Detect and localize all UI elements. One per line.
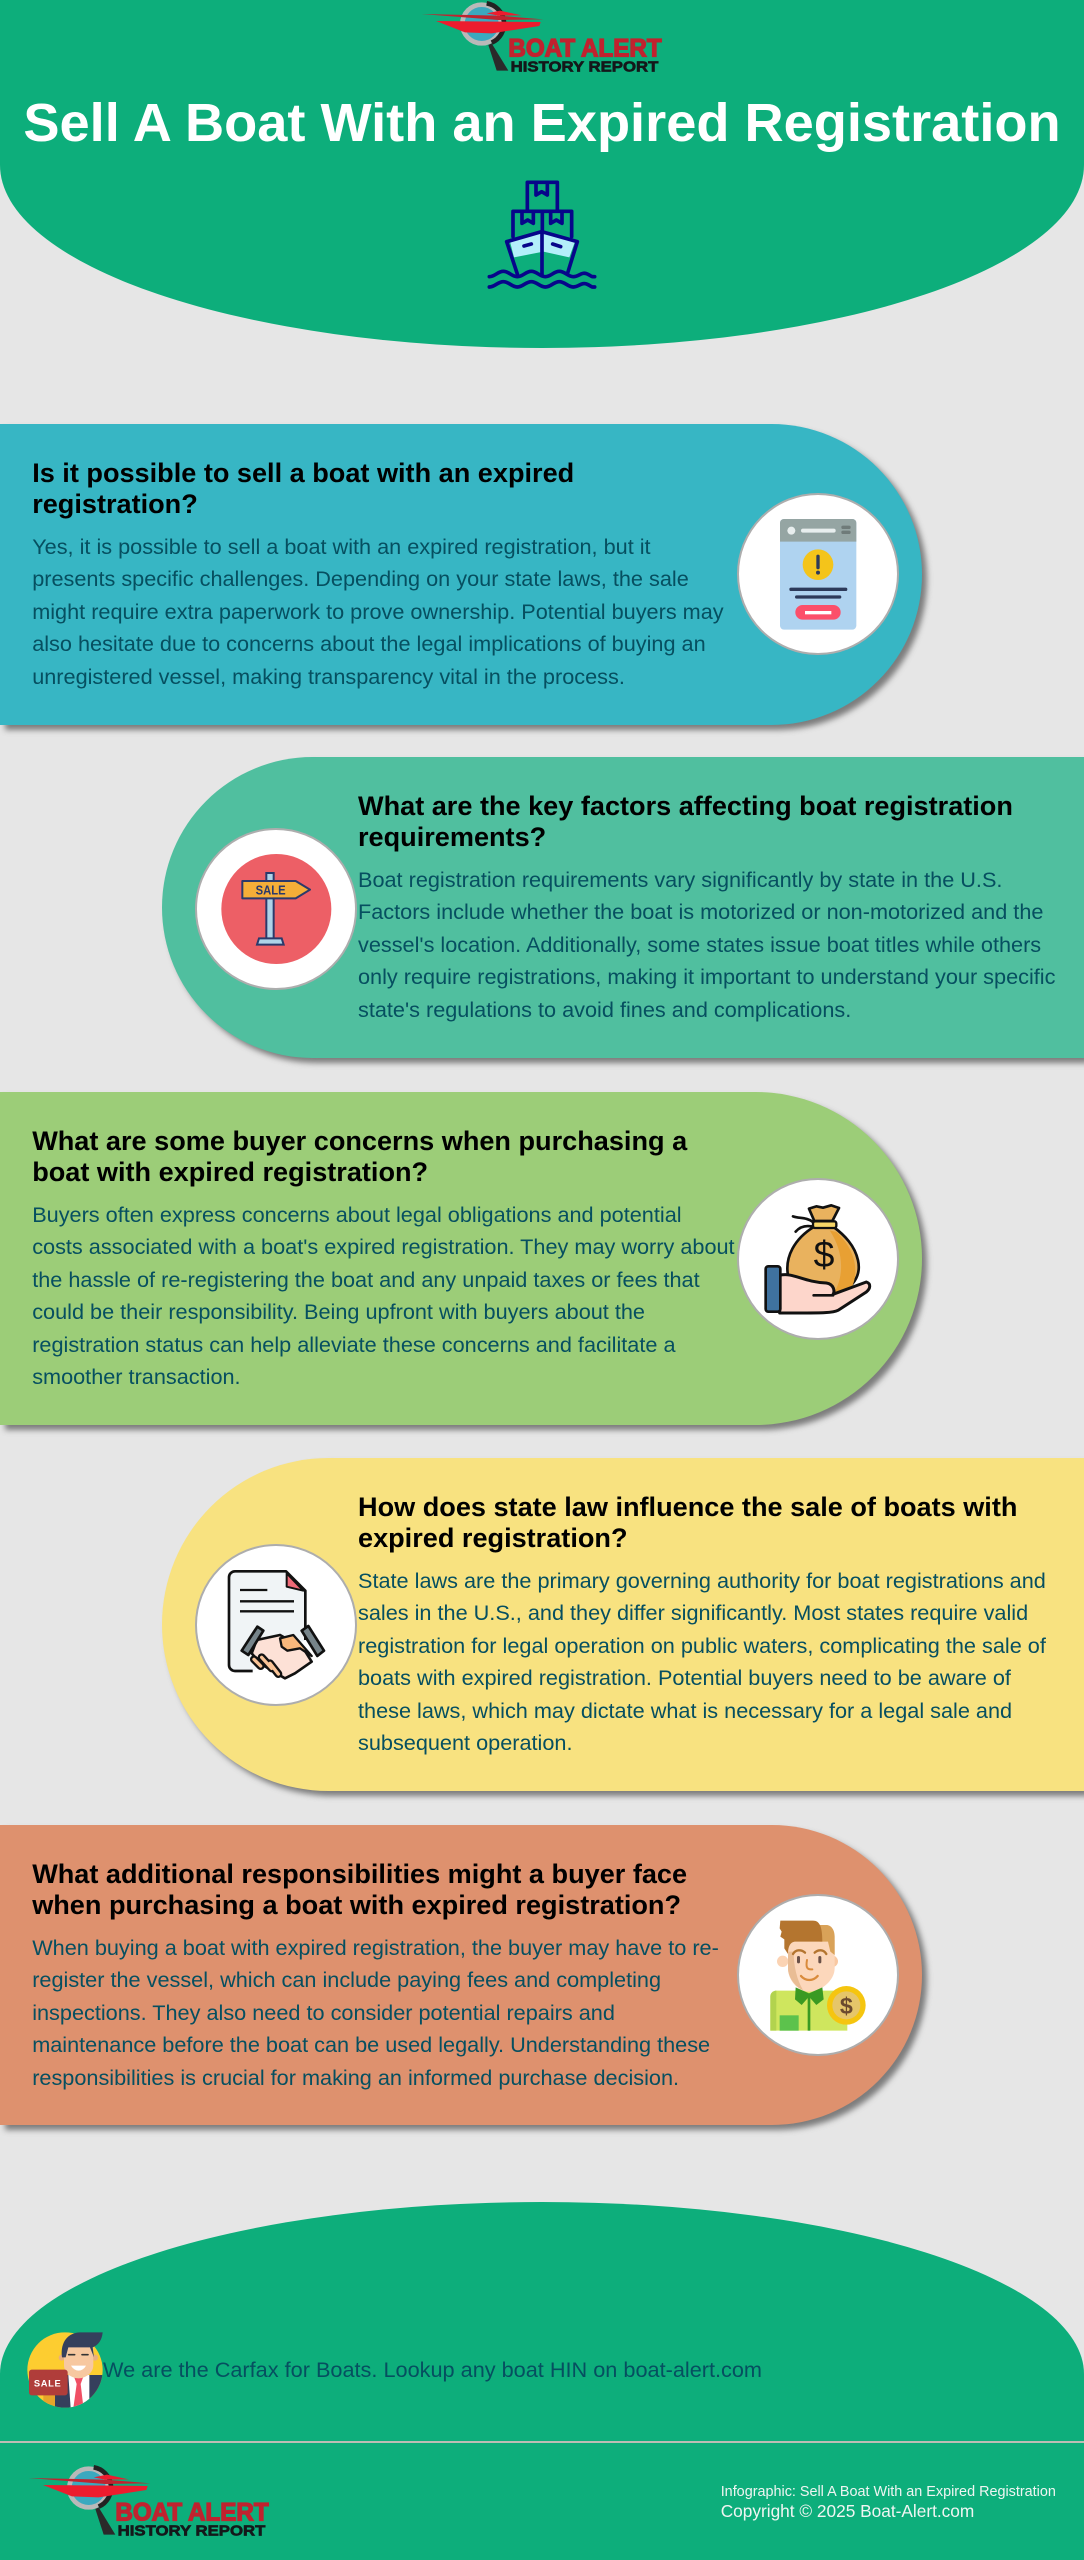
- icon: man with coin: [737, 1894, 899, 2056]
- icon: money bag in hand: [737, 1178, 899, 1340]
- text block: register the vessel, which can include paying fees and completing: [32, 1967, 661, 1992]
- heading: registration?: [32, 488, 198, 518]
- text block: could be their responsibility. Being upfront with buyers about the: [32, 1299, 645, 1324]
- text block: these laws, which may dictate what is necessary for a legal sale and: [358, 1698, 1012, 1723]
- icon: money bag in hand: $: [814, 1233, 835, 1275]
- heading: requirements?: [358, 820, 546, 852]
- text block: sales in the U.S., and they differ significantly. Most states require valid: [358, 1600, 1028, 1625]
- panel: state law: [162, 1458, 1084, 1791]
- text block: Factors include whether the boat is motorized or non-motorized and the: [358, 899, 1043, 924]
- panel: buyer concerns: [0, 1092, 922, 1425]
- icon: warning document: [737, 493, 899, 655]
- text block: [32, 534, 724, 689]
- icon: cargo ship: [488, 180, 596, 289]
- text block: [32, 1935, 719, 2090]
- text block: smoother transaction.: [32, 1364, 241, 1389]
- text block: Boat registration requirements vary significantly by state in the U.S.: [358, 867, 1002, 892]
- icon: salesman avatar: SALE: [34, 2378, 61, 2388]
- logo: Boat Alert header: HISTORY REPORT: [511, 58, 658, 75]
- heading: [358, 790, 1013, 852]
- heading: How does state law influence the sale of boats with: [358, 1490, 1017, 1522]
- heading: Is it possible to sell a boat with an expired: [32, 456, 574, 488]
- footer credit: Copyright © 2025 Boat-Alert.com: [721, 2501, 974, 2521]
- text block: might require extra paperwork to prove ownership. Potential buyers may: [32, 599, 724, 624]
- heading: when purchasing a boat with expired registration?: [32, 1888, 681, 1920]
- heading: What are some buyer concerns when purchasing a: [32, 1124, 687, 1156]
- icon: sale sign: SALE: [256, 883, 286, 897]
- text block: vessel's location. Additionally, some states issue boat titles while others: [358, 932, 1041, 957]
- icon: man with coin: $: [840, 1993, 853, 2019]
- icon: sale sign: [195, 828, 357, 990]
- header band: [0, 0, 1084, 348]
- text block: state's regulations to avoid fines and complications.: [358, 997, 851, 1022]
- heading: [358, 1490, 1017, 1552]
- panel: is it possible: [0, 424, 922, 725]
- logo: Boat Alert header: BOAT ALERT: [508, 35, 662, 63]
- panel: buyer responsibilities: [0, 1825, 922, 2125]
- footer credit: [721, 2484, 1056, 2521]
- logo: Boat Alert footer: [29, 2465, 270, 2539]
- logo: Boat Alert footer: HISTORY REPORT: [117, 2522, 265, 2539]
- text block: also hesitate due to concerns about the legal implications of buying an: [32, 631, 706, 656]
- panel: key factors: [162, 757, 1084, 1058]
- text block: [32, 1202, 735, 1389]
- icon: salesman avatar: [27, 2332, 103, 2408]
- text block: subsequent operation.: [358, 1730, 572, 1755]
- footer credit: Infographic: Sell A Boat With an Expired Registration: [721, 2484, 1056, 2500]
- tagline: We are the Carfax for Boats. Lookup any boat HIN on boat-alert.com: [103, 2357, 762, 2382]
- heading: [32, 1124, 688, 1186]
- title: Sell A Boat With an Expired Registration: [23, 93, 1061, 153]
- text block: responsibilities is crucial for making an informed purchase decision.: [32, 2065, 679, 2090]
- heading: [32, 1858, 687, 1920]
- heading: expired registration?: [358, 1522, 628, 1552]
- text block: the hassle of re-registering the boat and any unpaid taxes or fees that: [32, 1267, 700, 1292]
- heading: [32, 456, 574, 518]
- heading: What additional responsibilities might a buyer face: [32, 1858, 687, 1888]
- text block: maintenance before the boat can be used legally. Understanding these: [32, 2032, 710, 2057]
- text block: presents specific challenges. Depending on your state laws, the sale: [32, 566, 689, 591]
- logo: Boat Alert footer: BOAT ALERT: [115, 2499, 268, 2527]
- text block: boats with expired registration. Potential buyers need to be aware of: [358, 1665, 1011, 1690]
- text block: When buying a boat with expired registration, the buyer may have to re-: [32, 1935, 719, 1960]
- text block: Buyers often express concerns about legal obligations and potential: [32, 1202, 682, 1227]
- text block: registration for legal operation on public waters, complicating the sale of: [358, 1633, 1046, 1658]
- icon: contract handshake: [195, 1544, 357, 1706]
- text block: registration status can help alleviate these concerns and facilitate a: [32, 1332, 676, 1357]
- text block: State laws are the primary governing authority for boat registrations and: [358, 1568, 1046, 1593]
- text block: only require registrations, making it important to understand your specific: [358, 964, 1055, 989]
- text block: [358, 1568, 1046, 1755]
- text block: unregistered vessel, making transparency vital in the process.: [32, 664, 625, 689]
- text block: Yes, it is possible to sell a boat with an expired registration, but it: [32, 534, 651, 559]
- heading: boat with expired registration?: [32, 1156, 428, 1186]
- footer band: [0, 2202, 1084, 2560]
- text block: [358, 867, 1055, 1022]
- text block: inspections. They also need to consider potential repairs and: [32, 2000, 615, 2025]
- logo: Boat Alert header: [422, 1, 662, 75]
- text block: costs associated with a boat's expired registration. They may worry about: [32, 1234, 735, 1259]
- heading: What are the key factors affecting boat registration: [358, 790, 1013, 820]
